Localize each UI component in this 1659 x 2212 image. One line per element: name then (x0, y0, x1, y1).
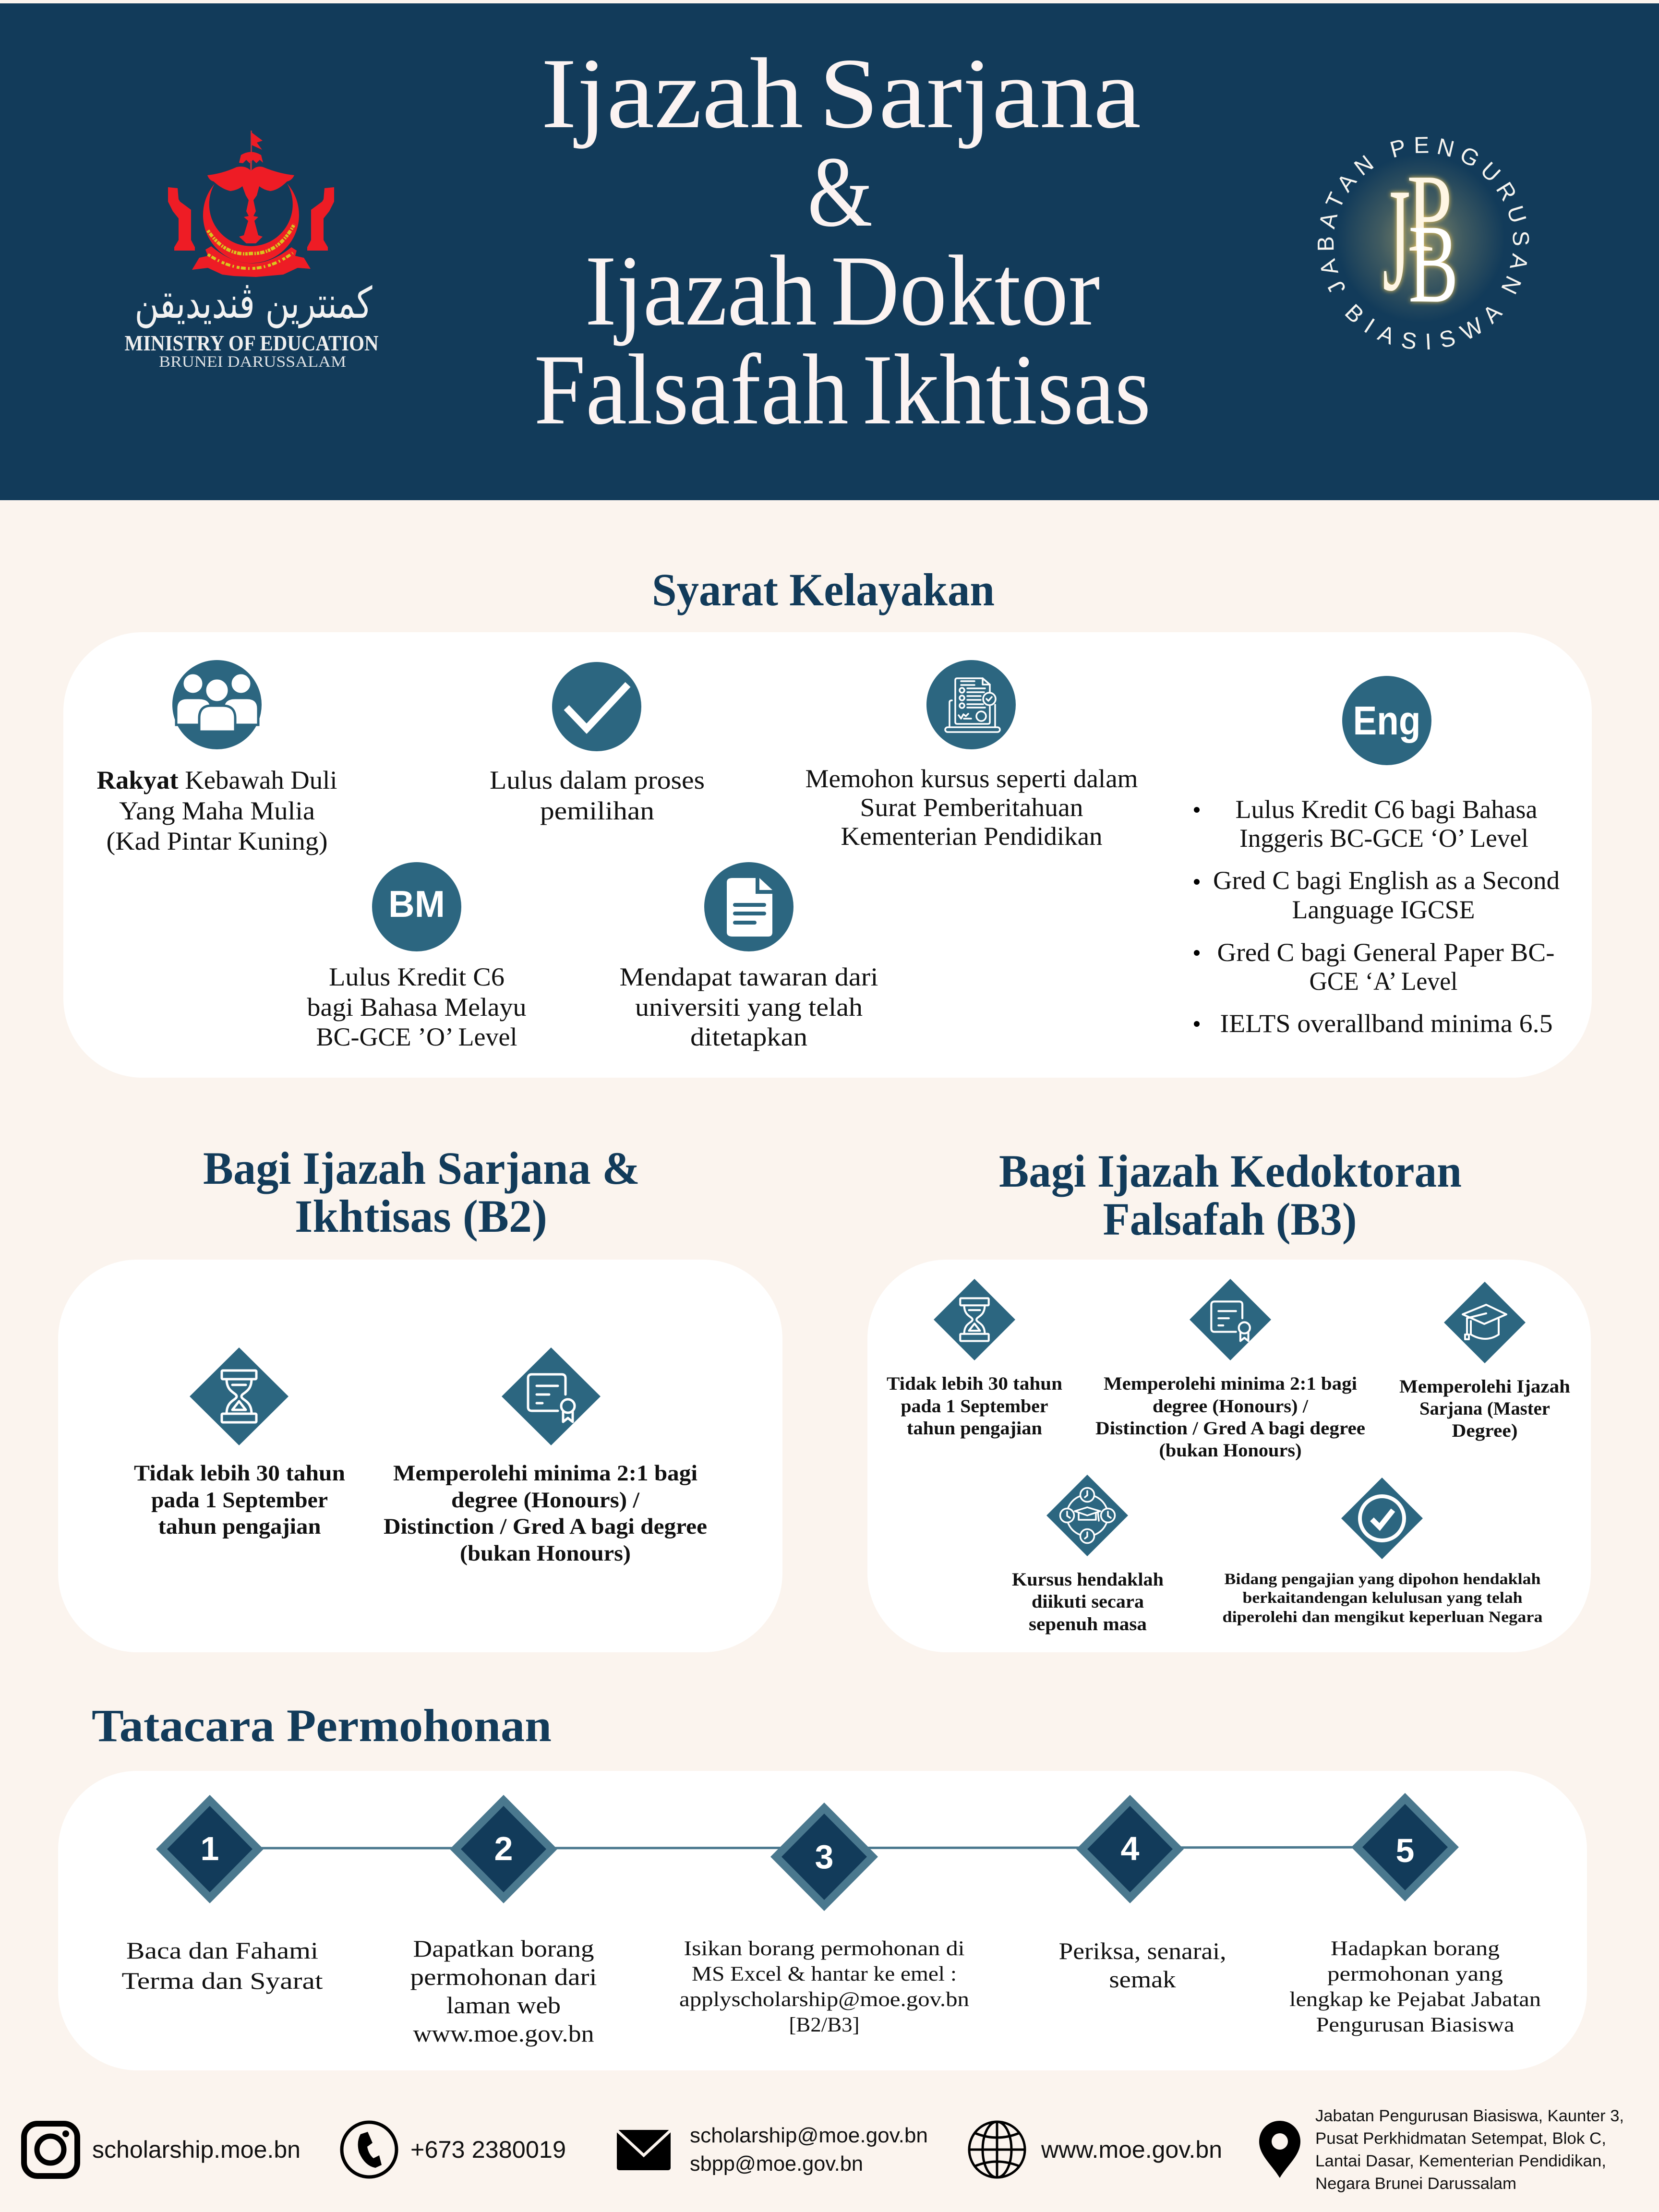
logo monogram: P (1407, 152, 1453, 275)
step 2: 2 (494, 1830, 513, 1867)
item: umur: Tidak lebih 30 tahun (887, 1373, 1062, 1394)
step 2 (410, 1795, 597, 2047)
step 3 (679, 1803, 969, 2036)
item: kelulusan: Distinction / Gred A bagi degree (1095, 1418, 1365, 1439)
item: rakyat: Yang Maha Mulia (119, 796, 315, 825)
contact: address: Negara Brunei Darussalam (1315, 2175, 1516, 2193)
contact: website (969, 2122, 1222, 2177)
item: umur (134, 1347, 345, 1539)
item: ijazah sarjana (1399, 1282, 1570, 1441)
step 2: laman web (446, 1992, 561, 2019)
item: english requirement: Inggeris BC-GCE ‘O’ Level (1239, 824, 1528, 853)
logo monogram: B (1408, 201, 1458, 326)
logo ring text top: JABATAN PENGURUSAN (1318, 137, 1529, 295)
item: english requirement: Eng (1353, 698, 1421, 743)
step 3: [B2/B3] (789, 2014, 859, 2036)
contact: email: sbpp@moe.gov.bn (690, 2152, 863, 2176)
step 3: applyscholarship@moe.gov.bn (679, 1988, 969, 2011)
title: & (807, 136, 873, 248)
step 2: Dapatkan borang (413, 1935, 594, 1962)
item: bahasa melayu: BC-GCE ’O’ Level (316, 1022, 517, 1051)
contact: phone: +673 2380019 (410, 2136, 566, 2163)
item: rakyat: (Kad Pintar Kuning) (107, 827, 327, 855)
item: sepenuh masa: diikuti secara (1032, 1591, 1144, 1612)
item: kelulusan: (bukan Honours) (460, 1541, 631, 1566)
heading: b3 (999, 1145, 1462, 1245)
item: memohon kursus: Kementerian Pendidikan (841, 822, 1102, 851)
item: umur: tahun pengajian (907, 1418, 1042, 1439)
panel: syarat kelayakan (63, 632, 1592, 1078)
step 1: 1 (201, 1830, 219, 1867)
title: Ijazah Doktor (585, 235, 1100, 347)
item: kelulusan: (bukan Honours) (1159, 1440, 1302, 1461)
step 5: permohonan yang (1327, 1963, 1503, 1985)
item: lulus pemilihan (490, 662, 705, 825)
item: ijazah sarjana: Sarjana (Master (1419, 1398, 1550, 1419)
heading: syarat kelayakan: Syarat Kelayakan (652, 564, 995, 615)
item: english requirement (1194, 676, 1560, 1038)
item: english requirement: Gred C bagi English as a Second (1213, 866, 1560, 895)
panel: tatacara permohonan (58, 1771, 1587, 2070)
icon: state emblem (168, 131, 334, 277)
item: rakyat (97, 660, 337, 855)
heading: b3: Bagi Ijazah Kedoktoran (999, 1145, 1462, 1197)
item: english requirement: Gred C bagi General Paper BC- (1217, 938, 1554, 967)
contact: email (617, 2124, 928, 2176)
logo: jabatan pengurusan biasiswa (1318, 137, 1529, 349)
item: memohon kursus (805, 660, 1138, 851)
step 5: Pengurusan Biasiswa (1316, 2014, 1514, 2036)
item: tawaran universiti: ditetapkan (690, 1022, 807, 1051)
contact: phone (342, 2122, 566, 2177)
item: umur: Tidak lebih 30 tahun (134, 1461, 345, 1486)
step 3: MS Excel & hantar ke emel : (692, 1963, 957, 1985)
item: bidang pengajian (1222, 1478, 1543, 1626)
logo ring text bottom: BIASISWA (1345, 304, 1503, 349)
item: kelulusan (384, 1347, 707, 1566)
item: lulus pemilihan: pemilihan (540, 796, 654, 825)
contact: website: www.moe.gov.bn (1041, 2136, 1222, 2163)
item: sepenuh masa: sepenuh masa (1029, 1614, 1147, 1635)
title: Falsafah Ikhtisas (534, 334, 1151, 445)
item: kelulusan (1095, 1279, 1365, 1461)
heading: b3: Falsafah (B3) (1103, 1193, 1357, 1245)
step 2: permohonan dari (410, 1963, 597, 1990)
ministry name: MINISTRY OF EDUCATION (125, 331, 378, 355)
step 3: Isikan borang permohonan di (684, 1937, 965, 1960)
step 1: Baca dan Fahami (126, 1937, 318, 1964)
item: english requirement: GCE ‘A’ Level (1310, 967, 1457, 996)
item: lulus pemilihan: Lulus dalam proses (490, 766, 705, 794)
item: sepenuh masa (1012, 1475, 1164, 1635)
item: bahasa melayu: Lulus Kredit C6 (329, 962, 505, 991)
contact: address: Pusat Perkhidmatan Setempat, Blok C, (1315, 2129, 1606, 2148)
item: kelulusan: Distinction / Gred A bagi degree (384, 1514, 707, 1539)
step 5: 5 (1396, 1832, 1414, 1869)
item: english requirement: IELTS overallband minima 6.5 (1220, 1009, 1552, 1038)
item: english requirement: Lulus Kredit C6 bagi Bahasa (1236, 795, 1538, 824)
title (534, 38, 1151, 445)
item: tawaran universiti: universiti yang telah (635, 993, 863, 1022)
logo: ministry of education (125, 131, 378, 371)
step 2: www.moe.gov.bn (413, 2020, 594, 2047)
step 4: 4 (1121, 1830, 1140, 1867)
header band (0, 3, 1659, 500)
heading: tatacara permohonan: Tatacara Permohonan (92, 1700, 552, 1751)
title: Ijazah Sarjana (541, 38, 1141, 149)
item: bahasa melayu: BM (388, 883, 445, 925)
item: bidang pengajian: berkaitandengan kelulusan yang telah (1242, 1589, 1523, 1607)
step 4: semak (1109, 1966, 1176, 1993)
step 5 (1289, 1793, 1541, 2036)
contact: email: scholarship@moe.gov.bn (690, 2124, 928, 2147)
country name: BRUNEI DARUSSALAM (159, 353, 346, 371)
item: rakyat: Rakyat Kebawah Duli (97, 766, 337, 794)
item: kelulusan: degree (Honours) / (1153, 1396, 1309, 1417)
step 4: Periksa, senarai, (1059, 1937, 1226, 1964)
item: kelulusan: degree (Honours) / (451, 1488, 640, 1513)
footer contacts (24, 2107, 1624, 2193)
step 5: lengkap ke Pejabat Jabatan (1289, 1988, 1541, 2011)
item: memohon kursus: Memohon kursus seperti dalam (805, 764, 1138, 793)
item: umur: pada 1 September (151, 1488, 328, 1513)
item: bidang pengajian: Bidang pengajian yang dipohon hendaklah (1224, 1571, 1541, 1588)
item: ijazah sarjana: Memperolehi Ijazah (1399, 1376, 1570, 1397)
item: bahasa melayu (307, 862, 526, 1051)
item: umur (887, 1279, 1062, 1439)
step 5: Hadapkan borang (1331, 1937, 1500, 1960)
ministry name in jawi: كمنترين ڤنديديقن (134, 278, 373, 328)
step 3: 3 (815, 1838, 833, 1875)
item: tawaran universiti (619, 862, 878, 1051)
heading: b2: Bagi Ijazah Sarjana & (203, 1142, 640, 1194)
step 1: Terma dan Syarat (122, 1967, 323, 1994)
item: kelulusan: Memperolehi minima 2:1 bagi (1104, 1373, 1357, 1394)
step 4 (1059, 1795, 1226, 1993)
step 1 (122, 1795, 323, 1994)
contact: instagram: scholarship.moe.bn (92, 2136, 301, 2163)
item: memohon kursus: Surat Pemberitahuan (860, 793, 1083, 822)
contact: address: Lantai Dasar, Kementerian Pendidikan, (1315, 2152, 1606, 2170)
item: sepenuh masa: Kursus hendaklah (1012, 1569, 1164, 1590)
item: ijazah sarjana: Degree) (1452, 1420, 1518, 1441)
item: tawaran universiti: Mendapat tawaran dari (619, 962, 878, 991)
heading: b2 (203, 1142, 640, 1242)
item: english requirement: Language IGCSE (1292, 895, 1475, 924)
contact: address: Jabatan Pengurusan Biasiswa, Kaunter 3, (1315, 2107, 1624, 2125)
item: bahasa melayu: bagi Bahasa Melayu (307, 993, 526, 1022)
panel: b2 (58, 1260, 782, 1652)
timeline connector (210, 1847, 1405, 1848)
item: kelulusan: Memperolehi minima 2:1 bagi (393, 1461, 697, 1486)
contact: instagram (24, 2124, 301, 2176)
item: bidang pengajian: diperolehi dan mengikut keperluan Negara (1222, 1609, 1543, 1626)
contact: address (1259, 2107, 1624, 2193)
heading: b2: Ikhtisas (B2) (295, 1190, 547, 1242)
logo monogram: J (1382, 158, 1410, 322)
item: umur: tahun pengajian (158, 1514, 321, 1539)
item: umur: pada 1 September (901, 1396, 1048, 1417)
panel: b3 (867, 1260, 1591, 1652)
